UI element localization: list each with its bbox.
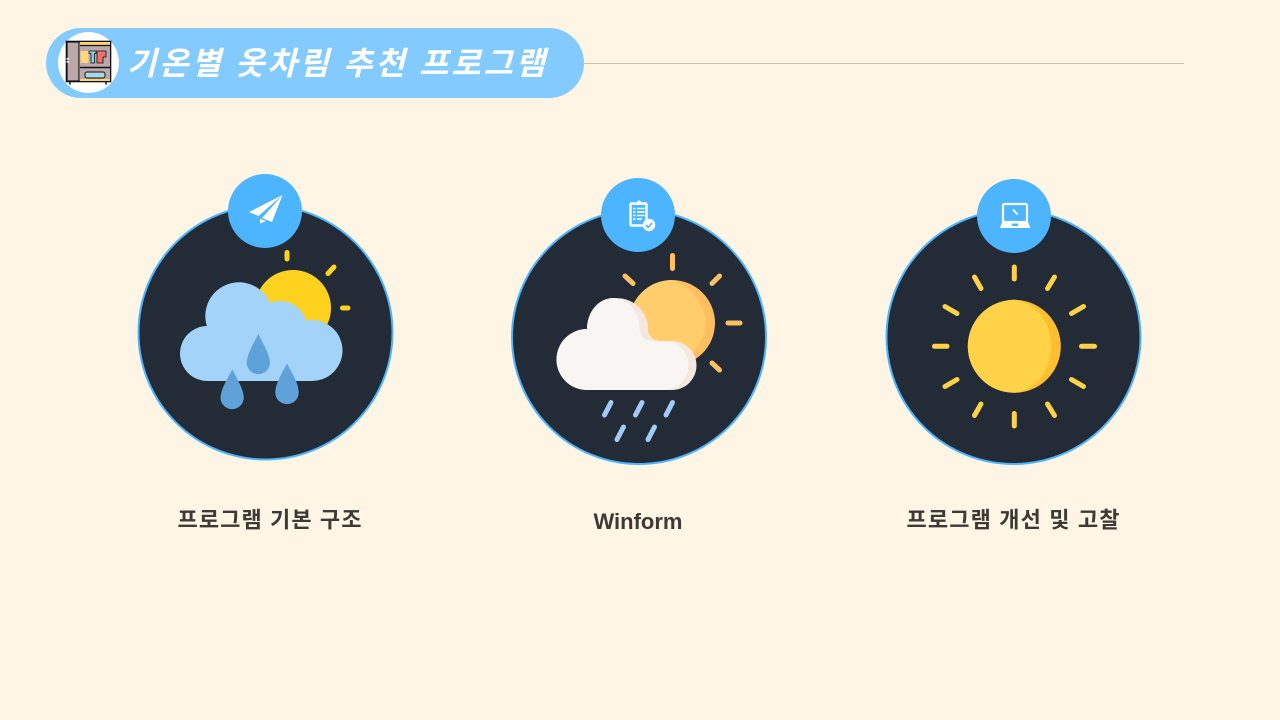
badge: clipboard checklist xyxy=(601,178,675,252)
disc: centre xyxy=(512,210,766,464)
label: 프로그램 기본 구조 xyxy=(178,508,362,532)
badge: laptop xyxy=(977,179,1051,253)
title banner xyxy=(46,28,584,98)
panel: winform xyxy=(512,178,766,534)
disc: left xyxy=(138,206,392,460)
panel: program structure xyxy=(138,174,392,532)
icon: sun behind rain cloud xyxy=(180,252,348,409)
badge: paper plane xyxy=(228,174,302,248)
disc: right xyxy=(886,210,1140,464)
icon: sun behind cloud with light rain xyxy=(556,256,740,440)
panel: improvements and review xyxy=(886,179,1140,532)
label: 프로그램 개선 및 고찰 xyxy=(906,508,1120,532)
icon: sun with rays xyxy=(934,267,1094,426)
label: Winform xyxy=(593,509,683,534)
icon: wardrobe xyxy=(58,32,119,93)
title text: 기온별 옷차림 추천 프로그램 xyxy=(127,46,550,82)
